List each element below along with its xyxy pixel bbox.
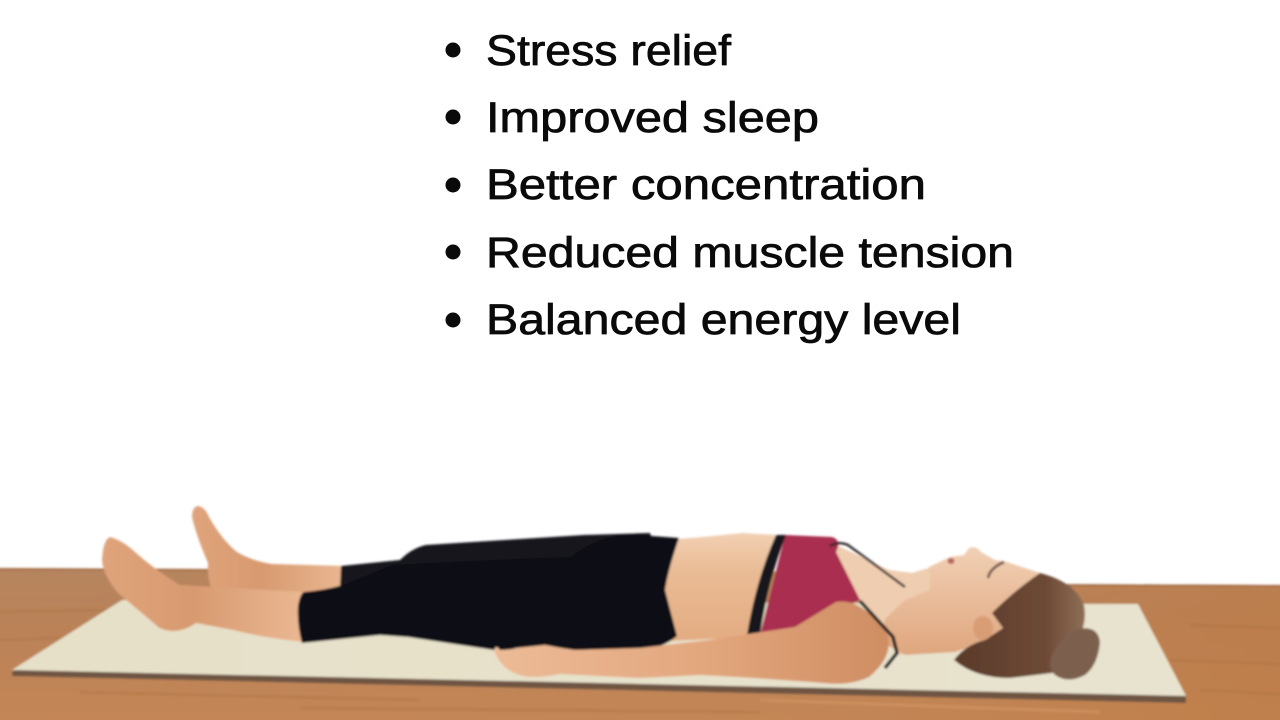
bullet item: reduced muscle tension: Reduced muscle tension xyxy=(486,229,1014,277)
bullet list of benefits xyxy=(446,27,1014,344)
closed eye and brow xyxy=(988,562,1004,578)
bullet item: better concentration: Better concentration xyxy=(486,161,926,209)
bullet item: improved sleep: Improved sleep xyxy=(486,94,819,142)
neck and face xyxy=(878,547,1040,655)
far legging xyxy=(340,533,672,600)
yoga mat xyxy=(12,600,1186,703)
bullet item: balanced energy level: Balanced energy level xyxy=(486,296,961,344)
chest skin xyxy=(826,540,960,655)
far leg and foot xyxy=(192,506,347,594)
bra strap over chest xyxy=(830,543,905,587)
shoulder strap xyxy=(860,601,897,668)
ear xyxy=(973,616,993,640)
bra black band xyxy=(747,535,786,635)
torso midriff xyxy=(650,533,778,642)
lips xyxy=(948,558,954,564)
hair and bun xyxy=(954,573,1100,680)
red sports bra xyxy=(760,535,860,635)
photo: woman lying in corpse pose on a yoga mat xyxy=(0,506,1280,720)
near leg and foot xyxy=(102,537,304,642)
wooden floor xyxy=(0,568,1280,720)
arm and hand xyxy=(494,602,889,684)
bullet item: stress relief: Stress relief xyxy=(486,27,732,75)
near legging xyxy=(298,534,679,652)
